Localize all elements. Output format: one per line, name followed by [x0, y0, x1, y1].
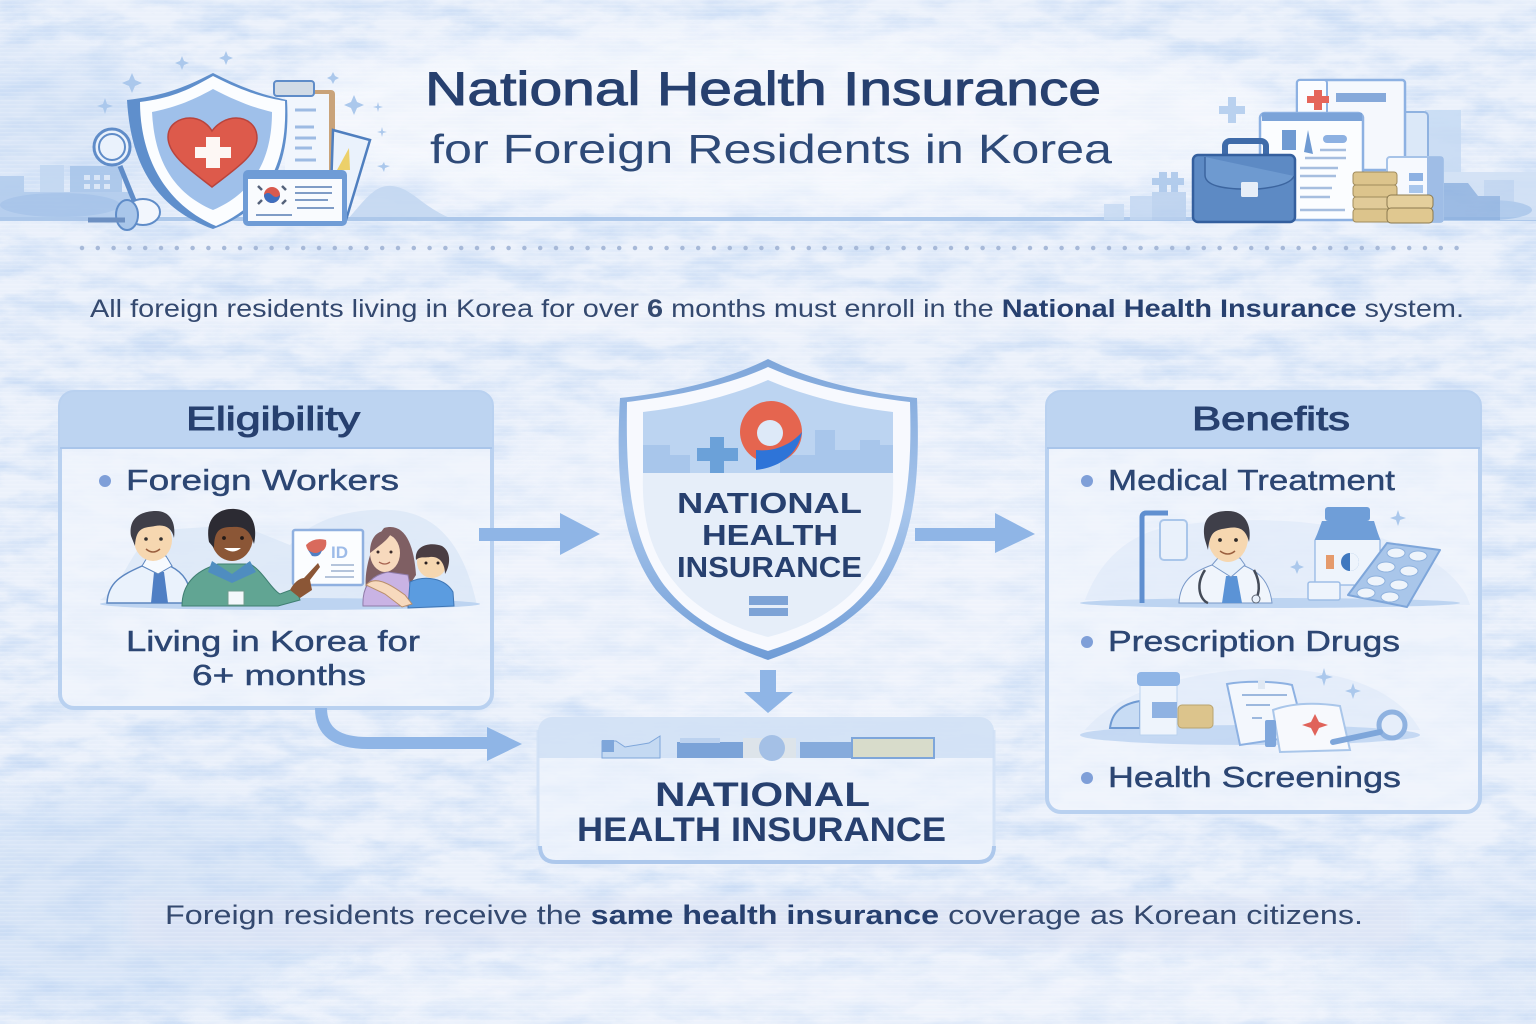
- arrow: eligibility to shield: [479, 513, 600, 555]
- shield label: [677, 488, 862, 584]
- icon: equals mark: [749, 596, 788, 616]
- panel label: HEALTH INSURANCE: [577, 811, 946, 849]
- header illustration: right skyline: [1104, 110, 1536, 220]
- panel label: NATIONAL: [655, 776, 870, 814]
- arrow: shield down to enrollment box: [744, 670, 793, 713]
- text: residency requirement: 6+ months: [192, 660, 366, 692]
- shield label: NATIONAL: [677, 488, 862, 520]
- icon: Korean ID card: [243, 170, 347, 226]
- bullet: prescription drugs: Prescription Drugs: [1108, 626, 1400, 658]
- icon: ID document and coins: [1353, 157, 1443, 223]
- dotted divider: [82, 246, 1466, 250]
- panel: eligibility: [60, 392, 492, 708]
- panel label: [577, 776, 946, 849]
- title: [425, 62, 1112, 172]
- shield label: HEALTH: [702, 520, 838, 552]
- intro statement: All foreign residents living in Korea for over 6 months must enroll in the National Health Insurance system.: [90, 295, 1464, 323]
- arrow: eligibility curve to enrollment box: [321, 708, 522, 761]
- shield label: INSURANCE: [677, 552, 862, 584]
- icon: clipboard with documents: [274, 81, 370, 220]
- illustration: cropped documents: [602, 735, 934, 761]
- illustration: doctor and medicine: [1080, 507, 1470, 608]
- arrow: shield to benefits: [915, 513, 1035, 553]
- bullet: medical treatment: Medical Treatment: [1108, 465, 1395, 497]
- panel: benefits: [1047, 392, 1480, 812]
- icon: stethoscope: [88, 129, 160, 230]
- title: National Health Insurance: [425, 62, 1101, 115]
- closing statement: Foreign residents receive the same health insurance coverage as Korean citizens.: [165, 900, 1363, 930]
- illustration: workers and family: [100, 509, 480, 610]
- panel: national health insurance enrollment: [538, 717, 994, 862]
- decorative plus, right: [1219, 97, 1245, 123]
- icon: shield with heart: [127, 73, 287, 229]
- text: residency requirement: Living in Korea for: [126, 626, 420, 658]
- decorative sparkles, left: [97, 51, 390, 172]
- header illustration: left skyline: [0, 165, 1536, 221]
- heading: benefits: Benefits: [1192, 400, 1350, 437]
- title: for Foreign Residents in Korea: [430, 126, 1112, 172]
- shield: national health insurance: [619, 359, 918, 660]
- illustration: workers and family: ID: [331, 543, 348, 562]
- text: residency requirement: [126, 626, 420, 692]
- heading: eligibility: Eligibility: [186, 400, 361, 437]
- icon: document stack: [1260, 80, 1428, 220]
- icon: taegeuk location ring: [740, 401, 802, 470]
- bullet: foreign workers: Foreign Workers: [126, 465, 399, 497]
- bullet: health screenings: Health Screenings: [1108, 762, 1401, 794]
- illustration: medication and records: [1080, 668, 1420, 752]
- icon: briefcase: [1193, 141, 1295, 222]
